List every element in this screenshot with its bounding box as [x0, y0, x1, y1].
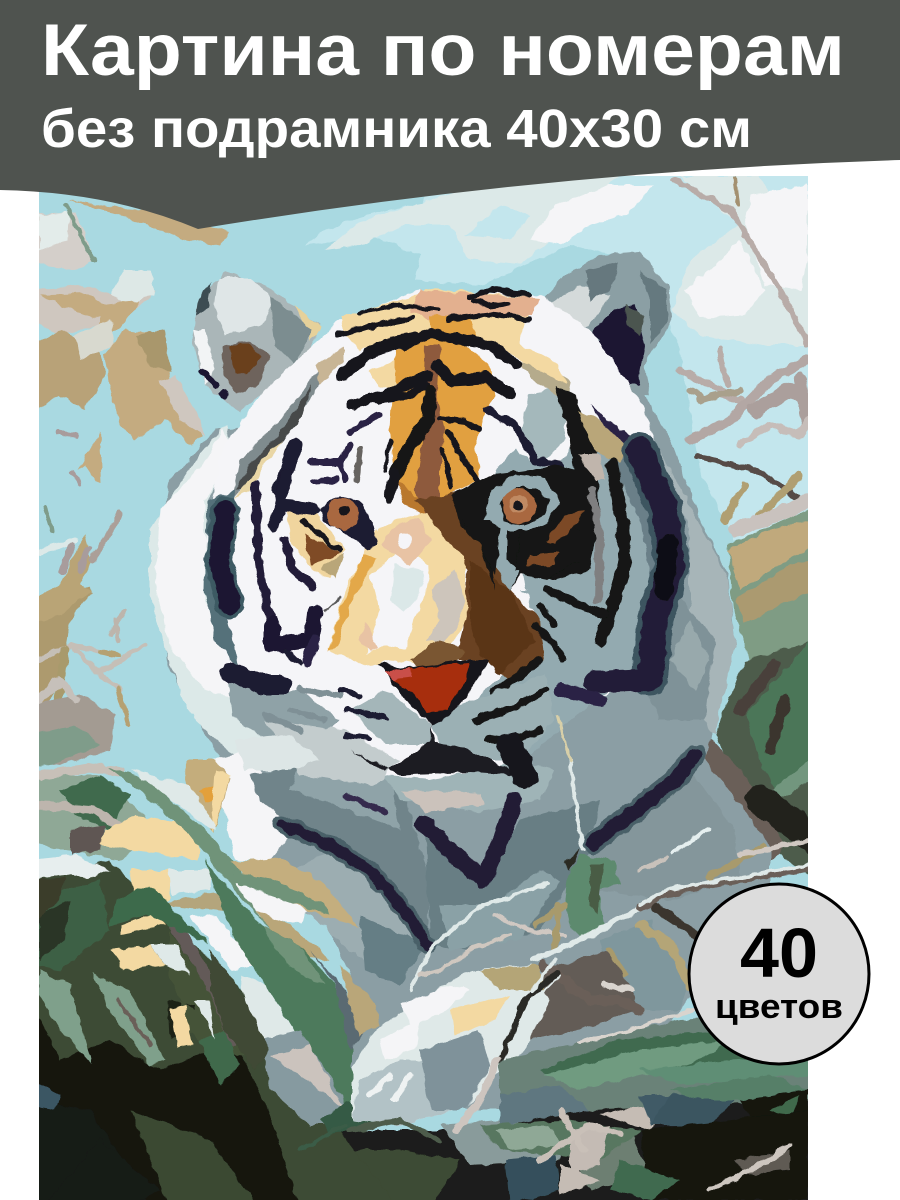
dry grass, right — [704, 510, 808, 874]
badge: 40 colours: 40 — [740, 914, 818, 992]
header banner — [0, 0, 900, 229]
subtitle: без подрамника 40х30 см — [41, 99, 752, 159]
right face stripes — [495, 450, 672, 700]
left ear — [192, 272, 322, 412]
badge: 40 colours: цветов — [715, 988, 843, 1026]
left eye patch — [285, 505, 345, 578]
sky background — [30, 170, 820, 1200]
head: white fur base — [205, 290, 680, 780]
background leaves and dry branches, left — [30, 200, 229, 530]
right face black patch — [452, 386, 630, 594]
title: Картина по номерам — [41, 10, 845, 91]
central green sprig — [565, 850, 620, 940]
nose bridge browns — [415, 490, 545, 685]
background branches, right — [675, 178, 808, 530]
face stripes — [219, 290, 560, 685]
paw — [352, 965, 550, 1125]
eyes — [318, 489, 536, 550]
twigs across foreground — [300, 715, 808, 1190]
dry grass, left — [30, 513, 145, 768]
muzzle cream — [328, 512, 467, 665]
badge: 40 colours — [689, 884, 869, 1064]
nose and mouth — [265, 660, 555, 775]
left cheek shading — [205, 490, 240, 670]
tan and green blades — [229, 858, 360, 928]
left brow shadow band — [232, 368, 322, 500]
chest stripes — [282, 755, 695, 945]
right ear — [540, 252, 672, 400]
painting: tiger paint-by-numbers artwork — [30, 170, 820, 1200]
bottom ground — [341, 1100, 808, 1200]
foreground grass, bottom right — [480, 1010, 810, 1200]
tiger head — [205, 288, 680, 785]
left eye — [318, 495, 378, 550]
tiger body — [150, 395, 770, 1110]
right eye — [502, 489, 536, 523]
forehead colours — [342, 288, 565, 385]
foreground grass, bottom left — [30, 760, 400, 1200]
head: grey right cheek — [478, 447, 650, 755]
big green leaf — [205, 860, 352, 1125]
pale broken strip with brown grass — [240, 976, 294, 1038]
